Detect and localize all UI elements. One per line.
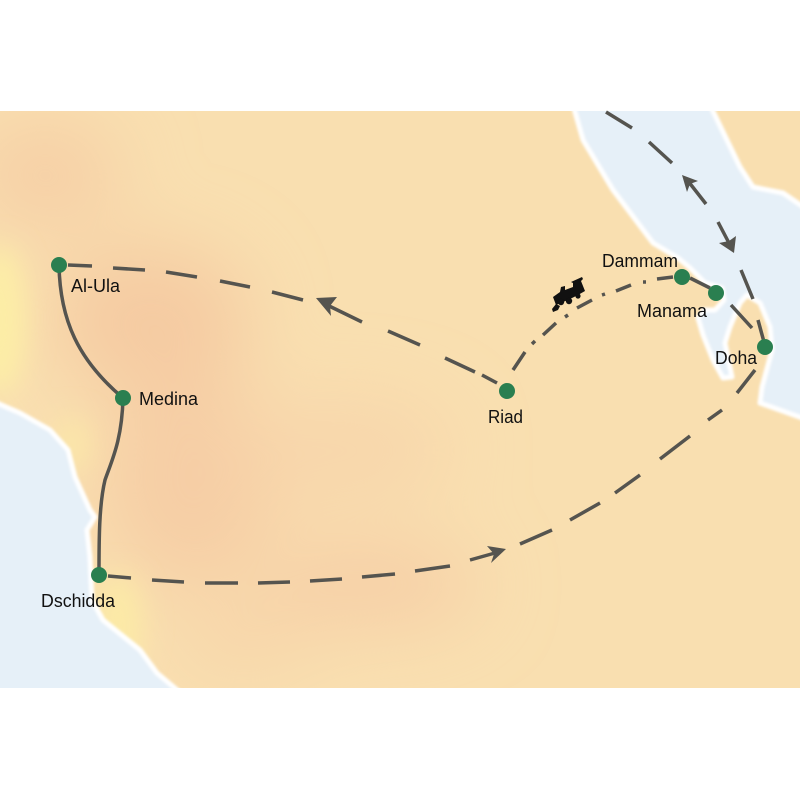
label: Riad: Riad (488, 407, 523, 427)
route: Gulf segments (690, 270, 764, 342)
arrow: towards Al-Ula (316, 297, 337, 316)
label: Medina: Medina (139, 389, 199, 409)
label: Doha: Doha (715, 348, 758, 368)
map background (0, 105, 800, 695)
arrow: northbound sea route (682, 175, 706, 204)
stop: Manama (708, 285, 724, 301)
stop: Dammam (674, 269, 690, 285)
stop: Dschidda (91, 567, 107, 583)
sea: Red Sea (0, 400, 183, 695)
stop: Riad (499, 383, 515, 399)
route: sea crossing, dashed (606, 112, 672, 163)
route: Al-Ula to Riad, dashed (68, 265, 497, 383)
icon: locomotive (552, 277, 585, 312)
stop: Medina (115, 390, 131, 406)
arrow: southbound sea route (718, 222, 736, 253)
label: Al-Ula: Al-Ula (71, 276, 121, 296)
label: Dschidda: Dschidda (41, 591, 116, 611)
arrow: towards Doha (487, 546, 506, 563)
label: Dammam: Dammam (602, 251, 678, 271)
stop: Doha (757, 339, 773, 355)
route map (0, 110, 800, 688)
route: Dschidda to Doha, dashed (108, 370, 755, 583)
sea: Persian Gulf (573, 105, 800, 419)
route: Al-Ula to Medina to Dschidda, solid (59, 265, 123, 575)
route: Riad to Dammam by train, dash-dot (513, 277, 673, 370)
stop: Al-Ula (51, 257, 67, 273)
label: Manama: Manama (637, 301, 708, 321)
